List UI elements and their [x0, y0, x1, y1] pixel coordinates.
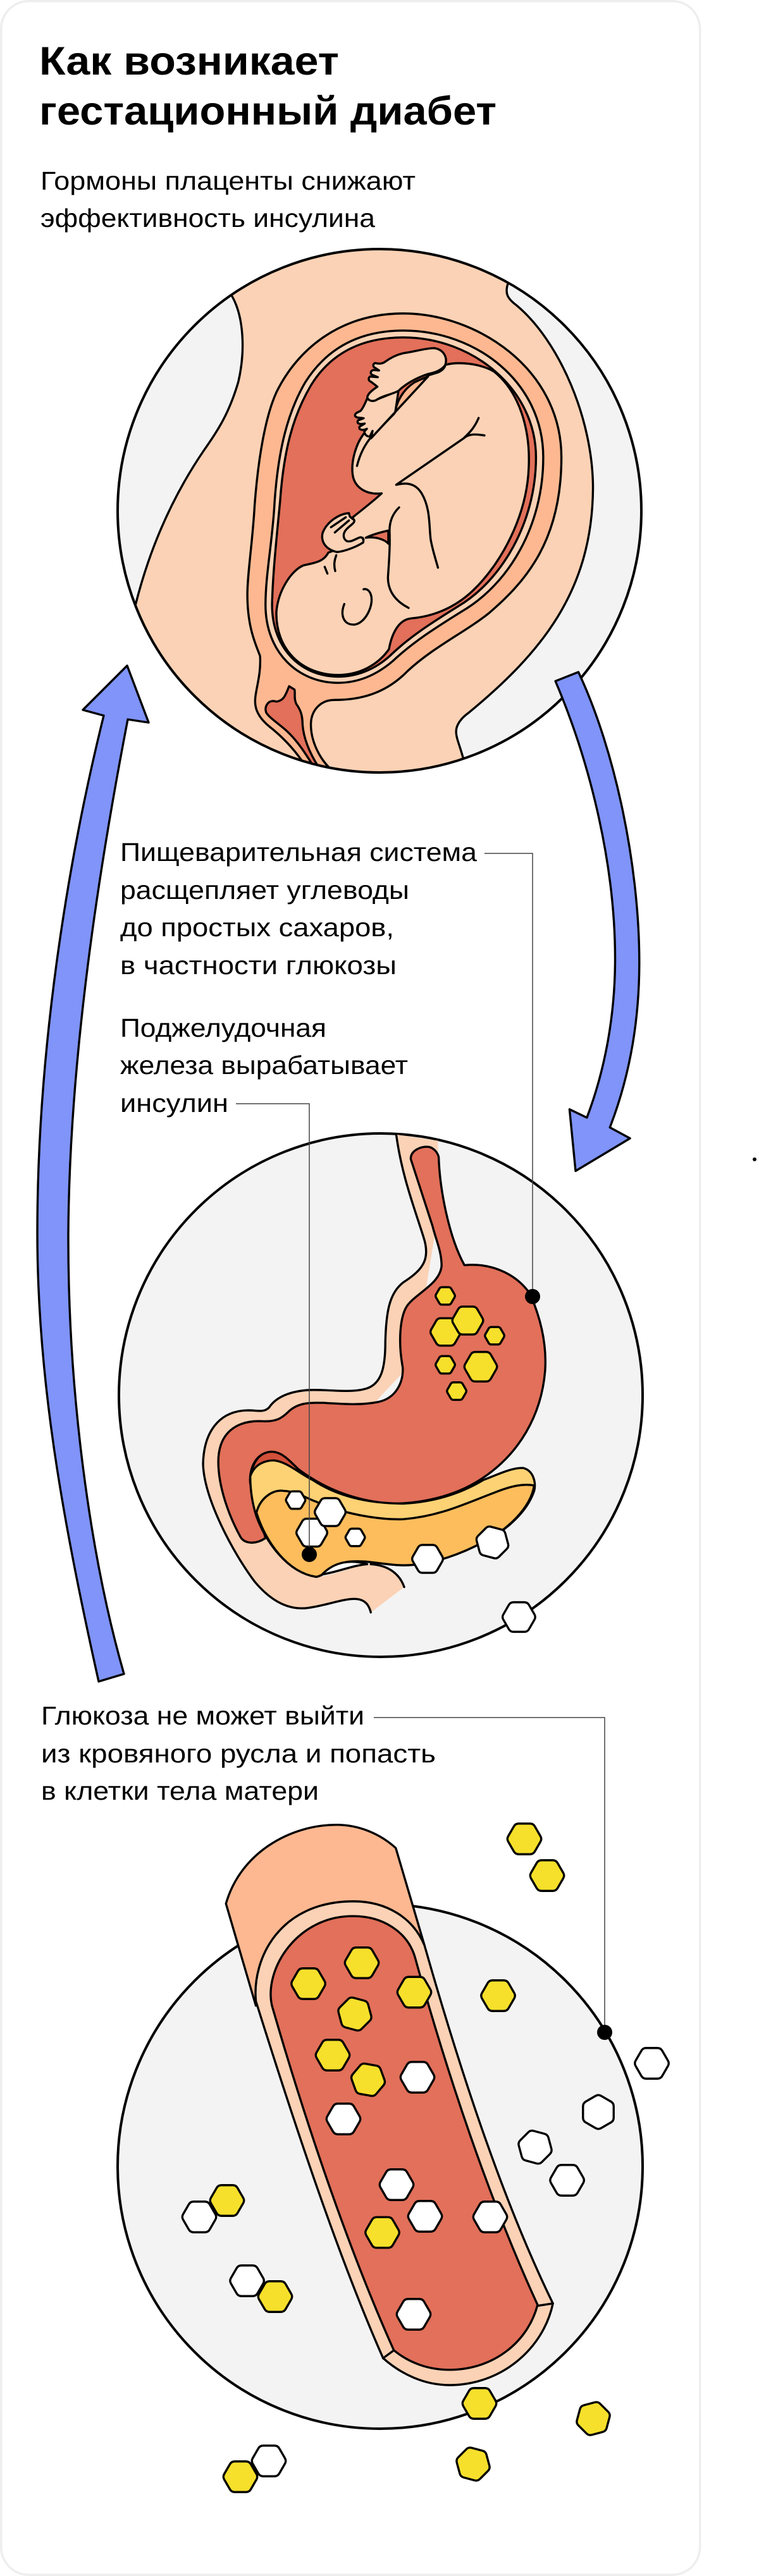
vessel lumen — [271, 1916, 538, 2370]
text block: digestive system: до простых сахаров, — [120, 913, 394, 942]
text block: digestive system: в частности глюкозы — [120, 951, 397, 980]
stomach — [218, 1147, 545, 1542]
text block: placenta hormones: эффективность инсулина — [40, 204, 375, 233]
text block: glucose cannot leave: из кровяного русла и попасть — [41, 1739, 436, 1768]
arrow: downward blue arrow — [555, 672, 639, 1171]
title — [39, 39, 497, 133]
text block: pancreas: инсулин — [120, 1089, 228, 1118]
text block: placenta hormones: Гормоны плаценты снижают — [40, 166, 416, 195]
title: Как возникает — [39, 39, 339, 83]
stray dot — [753, 1157, 756, 1161]
text block: pancreas — [120, 1013, 408, 1118]
membrane — [266, 331, 543, 683]
fetus hand — [322, 508, 409, 608]
callout line: glucose — [374, 1718, 612, 2040]
callout line: pancreas — [236, 1104, 317, 1562]
arrow: upward blue arrow — [37, 666, 149, 1682]
text block: glucose cannot leave — [41, 1701, 436, 1805]
callout line: digestive system — [484, 853, 540, 1304]
icon: yellow glucose hexagons — [210, 1824, 614, 2492]
pancreas — [250, 1460, 535, 1577]
icon: white insulin hexagons — [182, 2048, 669, 2476]
fetus feet — [355, 348, 446, 438]
amniotic cavity — [272, 338, 536, 676]
text block: glucose cannot leave: в клетки тела матери — [41, 1776, 319, 1805]
text block: glucose cannot leave: Глюкоза не может выйти — [41, 1701, 364, 1730]
gap beneath pancreas — [322, 1562, 367, 1574]
illustration: uterus with fetus — [116, 248, 643, 774]
duodenum crescent — [250, 1451, 298, 1480]
cervix — [266, 687, 318, 766]
vessel back wall — [226, 1825, 424, 2006]
icon: white insulin hexagons — [286, 1491, 535, 1632]
text block: placenta hormones — [40, 166, 416, 233]
text block: pancreas: железа вырабатывает — [120, 1051, 408, 1080]
mother's body — [137, 250, 592, 771]
title: гестационный диабет — [39, 89, 497, 133]
text block: digestive system: Пищеварительная система — [120, 838, 477, 867]
uterus wall — [247, 314, 562, 769]
stomach outer wall — [203, 1135, 438, 1613]
illustration: blood vessel with glucose — [118, 1824, 669, 2492]
text block: pancreas: Поджелудочная — [120, 1013, 326, 1042]
text block: digestive system: расщепляет углеводы — [120, 876, 409, 905]
icon: yellow glucose in stomach — [431, 1287, 504, 1400]
illustration: stomach and pancreas — [119, 1133, 643, 1657]
vessel wall — [256, 1901, 553, 2385]
text block: digestive system — [120, 838, 477, 980]
fetus body — [276, 363, 529, 675]
